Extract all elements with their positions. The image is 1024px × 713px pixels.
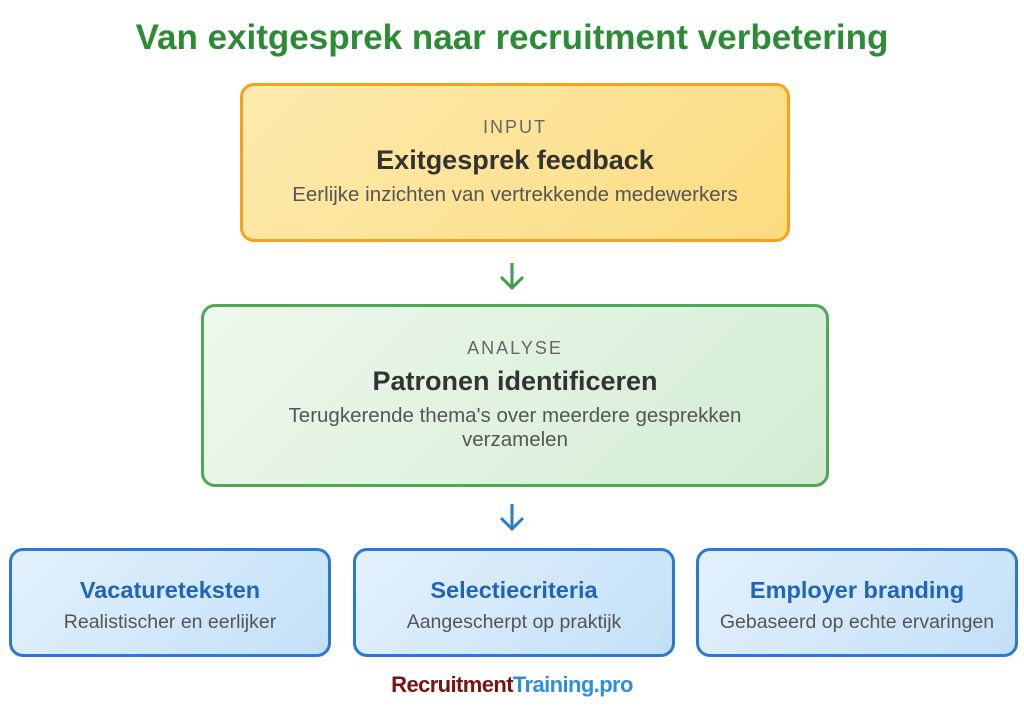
text: Gebaseerd op echte ervaringen (720, 611, 994, 633)
panel: input (240, 83, 790, 242)
panel: employer branding (696, 548, 1018, 657)
panel: analyse (201, 304, 829, 487)
logo: RecruitmentTraining.pro (391, 672, 633, 697)
panel: selectiecriteria (353, 548, 675, 657)
heading: Selectiecriteria (430, 577, 598, 603)
arrow: green (500, 263, 524, 290)
title: Van exitgesprek naar recruitment verbetering (136, 18, 888, 57)
text: Realistischer en eerlijker (64, 611, 276, 633)
text: Aangescherpt op praktijk (407, 611, 621, 633)
heading: patronen identificeren: Patronen identificeren (372, 366, 658, 396)
label: input: INPUT (483, 117, 547, 137)
heading: Vacatureteksten (80, 577, 260, 603)
heading: exitgesprek feedback: Exitgesprek feedback (376, 145, 654, 175)
text: analyse description: Terugkerende thema's over meerdere gesprekken (289, 404, 741, 427)
text: analyse description (288, 404, 741, 451)
text: analyse description: verzamelen (462, 428, 568, 451)
text: input description: Eerlijke inzichten van vertrekkende medewerkers (292, 183, 738, 206)
label: analyse: ANALYSE (467, 338, 563, 358)
panel: vacatureteksten (9, 548, 331, 657)
arrow: blue (500, 504, 524, 531)
heading: Employer branding (750, 577, 964, 603)
